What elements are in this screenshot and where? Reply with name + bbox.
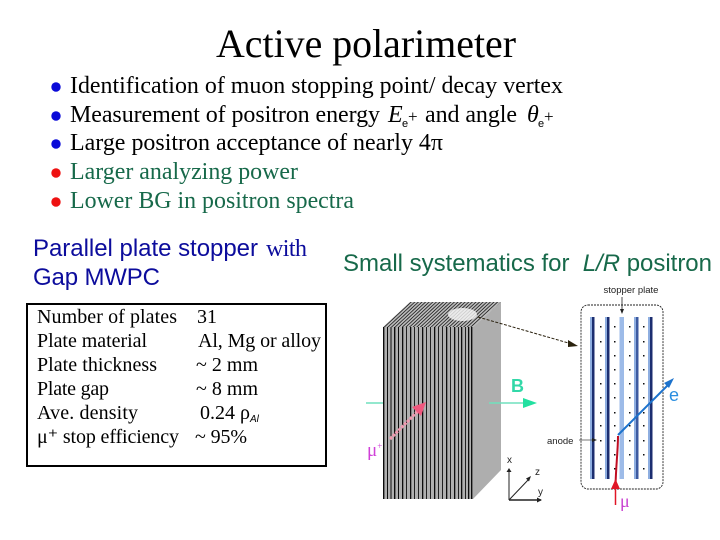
subheading: small systematics: Small systematics for L/R positron bbox=[343, 250, 712, 277]
dashed zoom arrow bbox=[478, 317, 578, 347]
parameter table: Al, Mg or alloy bbox=[198, 330, 321, 352]
positron label: e bbox=[669, 385, 679, 405]
muon track bbox=[616, 436, 618, 486]
bullet item: positron energy and angle: e bbox=[402, 118, 408, 130]
parameter table: μ⁺ stop efficiency bbox=[37, 426, 179, 448]
parameter table: Plate thickness bbox=[37, 354, 157, 376]
bullet item: muon stopping point: Identification of muon stopping point/ decay vertex bbox=[70, 73, 563, 99]
axes: x y z: y bbox=[538, 487, 543, 498]
bullet item: lower background: Lower BG in positron spectra bbox=[70, 188, 354, 214]
side face bbox=[473, 302, 501, 499]
parameter table: Plate material bbox=[37, 330, 147, 352]
axes: x y z bbox=[506, 455, 543, 502]
axes: x y z: z bbox=[535, 467, 540, 478]
plate opening ellipse bbox=[448, 308, 477, 321]
bullet item: positron acceptance: Large positron acceptance of nearly 4π bbox=[70, 130, 443, 156]
bullet item: positron energy and angle: + bbox=[408, 107, 418, 126]
bullet item: positron energy and angle: θ bbox=[527, 102, 539, 128]
title: Active polarimeter bbox=[216, 21, 516, 66]
subheading: parallel plate stopper: Gap MWPC bbox=[33, 264, 160, 291]
parameter table: Number of plates bbox=[37, 306, 177, 328]
bullet item: positron energy and angle: and angle bbox=[425, 102, 517, 128]
illustration: stopper block bbox=[366, 302, 501, 499]
plates bbox=[590, 317, 652, 479]
parameter table: Plate gap bbox=[37, 378, 109, 400]
bullet item: positron energy and angle: + bbox=[544, 107, 554, 126]
bullet item: positron energy and angle bbox=[51, 102, 554, 130]
bullet item: positron energy and angle: Measurement of positron energy bbox=[70, 102, 380, 128]
parameter table: ~ 8 mm bbox=[196, 378, 258, 400]
dashed frame bbox=[581, 305, 663, 489]
field line entering bbox=[366, 402, 384, 404]
positron track bbox=[618, 383, 670, 435]
subheading: parallel plate stopper: with bbox=[266, 236, 307, 262]
muon label: μ bbox=[620, 491, 630, 511]
muon arrow in block bbox=[390, 402, 426, 439]
subheading: parallel plate stopper bbox=[33, 235, 307, 291]
arrow: magnetic field B: B bbox=[511, 376, 524, 396]
top face bbox=[383, 302, 501, 327]
parameter table: Al bbox=[249, 414, 260, 425]
bullet item: positron energy and angle: e bbox=[538, 118, 544, 130]
bullet item: analyzing power: Larger analyzing power bbox=[70, 159, 298, 185]
parameter table: 0.24 ρ bbox=[200, 402, 250, 424]
parameter table: ~ 2 mm bbox=[196, 354, 258, 376]
bullet list bbox=[51, 73, 563, 214]
front face plates bbox=[383, 327, 473, 499]
parameter table: ~ 95% bbox=[195, 426, 247, 448]
parameter table bbox=[27, 304, 326, 466]
parameter table: 31 bbox=[197, 306, 217, 328]
parameter table: Ave. density bbox=[37, 402, 138, 424]
arrow: magnetic field B bbox=[489, 376, 537, 408]
stopper plate label: stopper plate bbox=[604, 285, 658, 296]
anode label: anode bbox=[547, 436, 573, 447]
bullet item: positron energy and angle: E bbox=[387, 102, 403, 128]
muon label: μ bbox=[367, 440, 377, 461]
illustration: detail of gap MWPC bbox=[547, 285, 679, 511]
axes: x y z: x bbox=[507, 455, 512, 466]
anode wires bbox=[600, 326, 644, 470]
subheading: parallel plate stopper: Parallel plate stopper bbox=[33, 235, 258, 262]
muon label: + bbox=[377, 441, 382, 451]
